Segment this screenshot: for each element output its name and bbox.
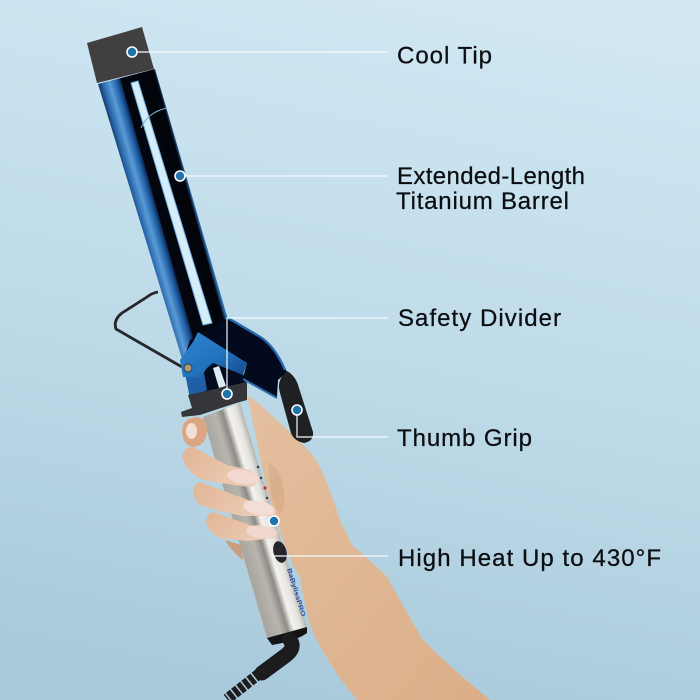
lower barrel blue band [183, 350, 207, 398]
ring finger [206, 512, 278, 541]
lower barrel [183, 318, 246, 398]
index finger [182, 447, 260, 487]
power cord loop [115, 292, 182, 367]
lever lower edge [243, 379, 277, 398]
silver handle [203, 403, 307, 638]
cord strain relief [227, 670, 264, 699]
markers [127, 47, 302, 526]
titanium barrel [98, 69, 246, 398]
fingertip top [182, 417, 207, 447]
collar [181, 382, 247, 417]
middle finger [193, 482, 276, 518]
label: extended-length titanium barrel: Titanium Barrel [396, 188, 569, 215]
palm crease [268, 462, 284, 515]
curling iron [87, 27, 313, 699]
safety divider arc [141, 108, 167, 128]
cool tip [87, 27, 154, 83]
label: safety divider: Safety Divider [398, 305, 561, 332]
lever arm [205, 318, 287, 397]
handle end cap [267, 627, 307, 645]
barrel highlight [131, 81, 212, 325]
lever edge [228, 318, 285, 370]
callout lines [132, 52, 388, 556]
cord boot [262, 640, 292, 673]
label: extended-length titanium barrel: Extended-Length [397, 163, 585, 190]
forearm and hand [247, 395, 490, 700]
lower barrel highlight [213, 366, 226, 388]
label: thumb grip: Thumb Grip [397, 425, 532, 452]
label: cool tip: Cool Tip [397, 42, 492, 70]
blue clamp bracket [180, 332, 247, 378]
lower finger shadow [225, 540, 243, 560]
fingers [182, 417, 278, 560]
label: high heat: High Heat Up to 430°F [398, 545, 661, 572]
power switch [271, 540, 289, 564]
brand text: BaBylissPRO [285, 568, 306, 617]
gold screw [184, 364, 192, 372]
indicator lights [257, 466, 268, 499]
thumb grip [279, 371, 313, 443]
label: extended-length titanium barrel [396, 163, 585, 215]
